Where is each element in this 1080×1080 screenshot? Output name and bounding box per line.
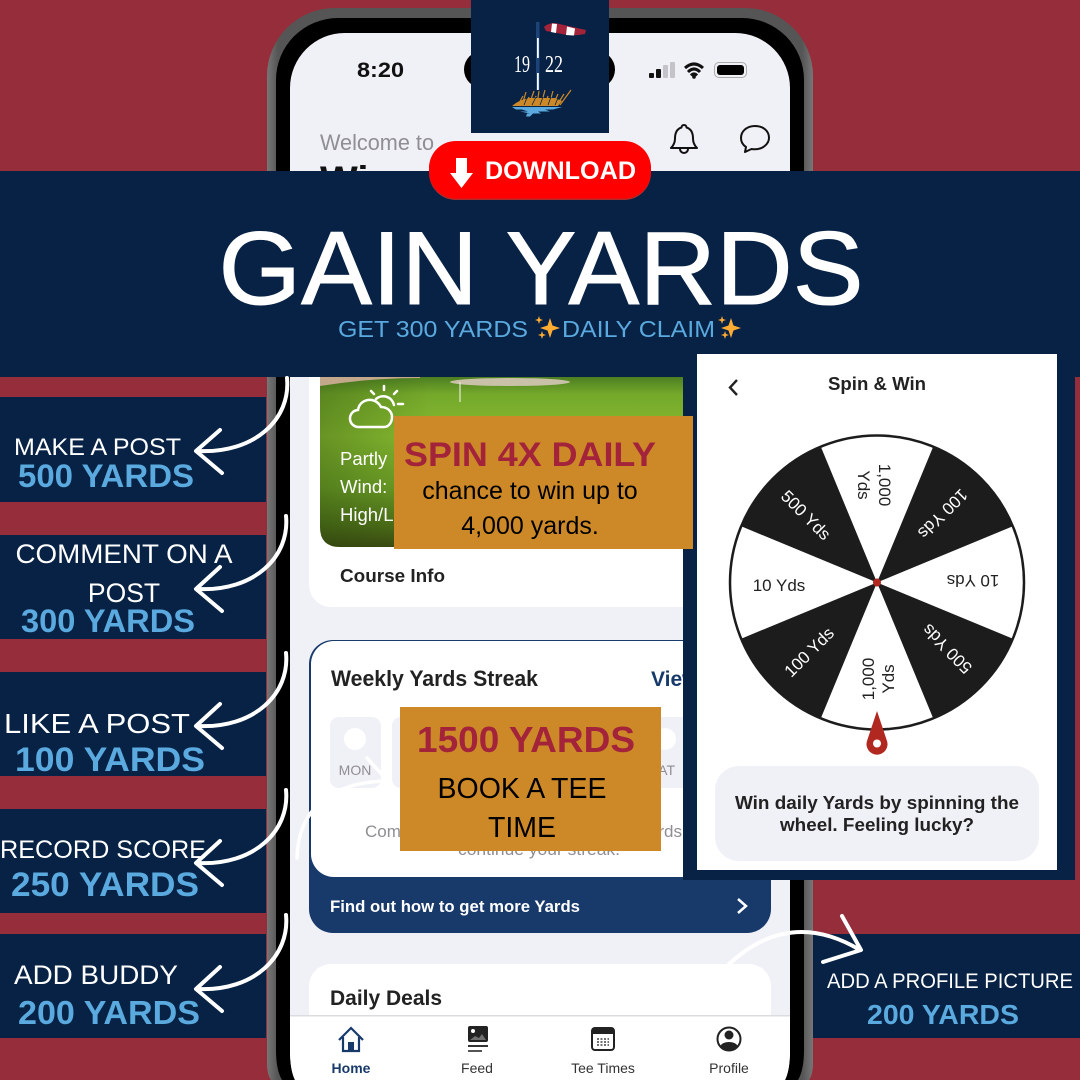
phone mockup: [267, 8, 813, 1080]
arrow: profile picture: [729, 916, 861, 964]
icon: down arrow: [450, 158, 473, 188]
grass: [512, 90, 571, 106]
logo: 22: [545, 52, 563, 78]
tab bar: [290, 1015, 790, 1080]
reward: record score: RECORD SCORE: [0, 836, 206, 864]
daily deals card: Daily Deals: [330, 987, 442, 1010]
day cells: Com: [365, 822, 401, 841]
wheel hub: [873, 578, 881, 586]
reward: comment on a post: POST: [88, 578, 160, 608]
reward: comment on a post: COMMENT ON A: [16, 539, 233, 569]
username partly hidden: Wi: [320, 159, 369, 203]
wheel labels: 500 Yds: [919, 620, 976, 677]
wheel labels: 1,000: [859, 658, 878, 700]
subtitle: DAILY CLAIM: [562, 316, 715, 342]
tab labels: Profile: [709, 1060, 749, 1076]
reward: make a post: [0, 397, 266, 502]
year: 19: [514, 52, 530, 78]
subtitle: GET 300 YARDS: [338, 316, 528, 342]
phone screen: [290, 33, 809, 1080]
icon: feed: [468, 1026, 488, 1052]
weather text: Wind:: [340, 476, 387, 497]
day cells: continue your streak.: [458, 840, 620, 859]
callout: spin 4x daily: 4,000 yards.: [461, 512, 599, 540]
tab labels: Home: [332, 1060, 371, 1076]
info box: wheel. Feeling lucky?: [779, 814, 974, 835]
reward: record score: [0, 809, 266, 913]
reward: add buddy: [0, 934, 266, 1038]
windsock: [544, 23, 586, 35]
wheel labels: 500 Yds: [777, 487, 834, 544]
label: DOWNLOAD: [485, 157, 636, 185]
reward: add buddy: ADD BUDDY: [14, 960, 178, 990]
heading: gain yards: GAIN YARDS: [218, 211, 864, 327]
wheel pointer: [866, 711, 888, 755]
day cells: MON: [339, 762, 371, 778]
panel title: Spin & Win: [828, 374, 926, 394]
arrow: make a post: [196, 378, 287, 473]
course photo: [320, 377, 683, 547]
reward: comment on a post: 300 YARDS: [21, 603, 195, 639]
callout: 1500 yards: TIME: [488, 812, 556, 844]
reward: comment on a post: [0, 535, 266, 639]
wheel labels: 1,000: [875, 464, 894, 506]
download button: [429, 141, 651, 200]
weather text: Partly: [340, 448, 388, 469]
reward: like a post: LIKE A POST: [4, 708, 190, 739]
status time: 8:20: [357, 59, 404, 82]
tab labels: Tee Times: [571, 1060, 635, 1076]
reward: record score: 250 YARDS: [11, 866, 199, 904]
course card: [309, 377, 683, 607]
reward: add buddy: 200 YARDS: [18, 994, 200, 1031]
phone body: [267, 8, 813, 1080]
icon: calendar: [592, 1028, 614, 1050]
day cells: rds: [658, 822, 682, 841]
reward: like a post: 100 YARDS: [15, 741, 205, 779]
wheel labels: Yds: [879, 664, 898, 694]
reward: add a profile picture: [813, 934, 1080, 1038]
reward: make a post: MAKE A POST: [14, 434, 181, 461]
welcome text: Welcome to: [320, 130, 434, 155]
wheel labels: 100 Yds: [781, 624, 838, 681]
info box: Win daily Yards by spinning the: [735, 792, 1019, 813]
water: [512, 107, 562, 116]
info box: [715, 766, 1039, 861]
dynamic island: [464, 55, 615, 84]
view link: View: [651, 668, 699, 691]
heading: Weekly Yards Streak: [331, 666, 539, 691]
arrow: comment on a post: [196, 516, 286, 611]
weekly yards streak card: [309, 640, 771, 933]
flag pole: [536, 22, 540, 90]
chevron: [738, 899, 746, 913]
icon: bell: [671, 125, 697, 153]
day cells: [330, 717, 691, 859]
callout: 1500 yards: [400, 707, 661, 851]
logo: [471, 0, 609, 133]
day cells: AT: [658, 762, 675, 778]
title banner: [0, 171, 1080, 377]
callout: spin 4x daily: SPIN 4X DAILY: [404, 436, 656, 474]
icon: home: [339, 1028, 363, 1051]
arrow: record score: [196, 790, 286, 885]
reward: add a profile picture: 200 YARDS: [867, 999, 1019, 1030]
callout: spin 4x daily: [394, 416, 693, 549]
spin and win panel: [683, 354, 1075, 880]
weather text: High/L: [340, 504, 393, 525]
reward: make a post: 500 YARDS: [18, 458, 194, 494]
icon: profile: [718, 1028, 740, 1051]
icon: weather: [350, 386, 403, 427]
reward: like a post: [0, 672, 266, 779]
status icons: [649, 62, 746, 79]
wheel labels: 100 Yds: [914, 485, 971, 542]
callout: 1500 yards: 1500 YARDS: [417, 719, 635, 760]
callout: spin 4x daily: chance to win up to: [422, 477, 638, 505]
subtitle: [338, 316, 741, 342]
prize wheel: [730, 436, 1024, 730]
arrow: book a tee time: [297, 758, 387, 858]
arrow: add buddy: [196, 915, 286, 1011]
arrow: like a post: [196, 653, 286, 748]
icon: chat: [741, 126, 769, 152]
wheel labels: 10 Yds: [753, 576, 805, 595]
wheel labels: [753, 464, 999, 700]
callout: 1500 yards: BOOK A TEE: [438, 773, 606, 805]
wheel labels: 10 Yds: [947, 571, 999, 590]
more yards link: Find out how to get more Yards: [330, 898, 580, 916]
back chevron: [730, 380, 737, 395]
wheel labels: Yds: [854, 470, 873, 500]
tab labels: Feed: [461, 1060, 493, 1076]
course info label: Course Info: [340, 566, 445, 586]
daily deals card: [309, 964, 771, 1015]
